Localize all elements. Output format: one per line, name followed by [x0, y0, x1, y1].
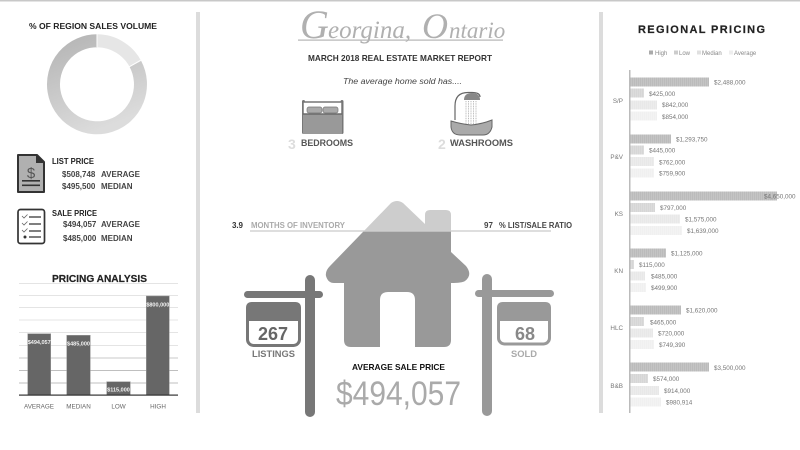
bar chart — [19, 296, 178, 410]
text: list price median: $495,500 — [62, 182, 96, 191]
panel: list price — [18, 155, 141, 192]
chart group: HLC: HLC — [610, 325, 623, 332]
panel: pricing analysis — [19, 274, 178, 410]
chart group: KN: $1,125,000 — [671, 250, 703, 258]
text: list price median: MEDIAN — [101, 182, 133, 191]
text: months of inventory: 3.9 — [232, 221, 244, 230]
bar chart: HIGH — [150, 404, 166, 410]
chart group: B&B: $914,000 — [664, 388, 691, 395]
icon: price document: $ — [27, 165, 36, 182]
text: sale price median: $485,000 — [63, 234, 97, 243]
chart group: HLC: $720,000 — [658, 330, 685, 338]
legend: High — [655, 51, 667, 57]
title: G — [300, 2, 329, 47]
number: sold: 68 — [515, 324, 535, 344]
chart group: S/P — [613, 78, 746, 121]
chart group: B&B: $574,000 — [653, 376, 680, 383]
chart group: S/P: $854,000 — [662, 114, 689, 121]
panel: region sales volume — [29, 22, 158, 128]
text: the average home sold has: The average home sold has.... — [343, 77, 462, 86]
chart group: KS: $1,575,000 — [685, 216, 717, 224]
text: average sale price label: AVERAGE SALE PRICE — [352, 362, 445, 372]
chart group: P&V — [610, 134, 708, 178]
chart group: KN: $115,000 — [639, 262, 665, 269]
donut chart — [53, 34, 141, 128]
bar chart: $800,000 — [146, 302, 169, 308]
chart group: B&B: $3,500,000 — [714, 365, 746, 372]
legend — [649, 50, 757, 57]
bar chart: AVERAGE — [24, 404, 54, 410]
text: sale price average: AVERAGE — [101, 220, 141, 229]
legend: Average — [734, 51, 757, 57]
chart group: S/P: $2,488,000 — [714, 80, 746, 86]
text: list price label: LIST PRICE — [52, 157, 95, 166]
bar chart: LOW — [111, 404, 126, 410]
heading: regional pricing: REGIONAL PRICING — [638, 24, 765, 36]
chart group: KN: $499,900 — [651, 285, 678, 292]
chart group: P&V: $762,000 — [659, 160, 686, 166]
chart group: S/P: $842,000 — [662, 102, 689, 109]
chart group: B&B: B&B — [610, 383, 623, 390]
chart group: KS: $797,000 — [660, 205, 687, 212]
chart group: P&V: $445,000 — [649, 148, 676, 154]
icon: checklist — [18, 210, 44, 244]
text: list/sale ratio: % LIST/SALE RATIO — [499, 221, 572, 230]
bar chart: MEDIAN — [66, 404, 91, 410]
chart group: HLC: $749,390 — [659, 342, 686, 349]
chart group: P&V: $1,293,750 — [676, 136, 708, 144]
title: O — [422, 6, 448, 46]
panel: regional pricing — [610, 24, 796, 413]
chart group: S/P: S/P — [613, 98, 623, 105]
chart group: KS: $1,639,000 — [687, 228, 719, 235]
chart group: KN: KN — [614, 268, 623, 275]
legend: Low — [679, 51, 691, 57]
text: sale price label: SALE PRICE — [52, 209, 98, 218]
title: eorgina, — [328, 17, 411, 44]
title: ntario — [449, 18, 505, 43]
chart group: P&V: P&V — [610, 154, 624, 161]
bar chart: $494,057 — [28, 340, 51, 346]
chart group: S/P: $425,000 — [649, 91, 676, 98]
text: list/sale ratio: 97 — [484, 221, 493, 230]
bar chart: $115,000 — [107, 388, 130, 394]
text: WASHROOMS — [450, 138, 513, 148]
text: washrooms: 2 — [438, 136, 446, 152]
chart group: HLC: $465,000 — [650, 320, 677, 326]
legend: Median — [702, 51, 722, 57]
chart group: KN — [614, 248, 703, 292]
chart group: KS: KS — [615, 211, 623, 218]
icon: bed — [302, 100, 344, 134]
chart group: HLC — [610, 306, 718, 349]
text: average sale price value: $494,057 — [336, 375, 461, 413]
subtitle: MARCH 2018 REAL ESTATE MARKET REPORT — [308, 53, 493, 63]
label: sold: SOLD — [511, 349, 537, 360]
text: list price average: $508,748 — [62, 170, 96, 179]
text: sale price average: $494,057 — [63, 220, 97, 229]
text: bedrooms: 3 — [288, 136, 296, 152]
sign: listings — [244, 275, 323, 417]
icon: shower and tub — [451, 92, 492, 135]
chart group: KN: $485,000 — [651, 274, 678, 280]
chart group: HLC: $1,620,000 — [686, 308, 718, 314]
text: months of inventory: MONTHS OF INVENTORY — [251, 221, 346, 230]
chart group: KS — [615, 192, 796, 235]
text: sale price median: MEDIAN — [101, 234, 133, 243]
icon: house — [326, 201, 469, 347]
sign: sold — [475, 274, 554, 416]
text: list price average: AVERAGE — [101, 170, 141, 179]
chart group: KS: $4,650,000 — [764, 194, 796, 200]
heading: pricing analysis: PRICING ANALYSIS — [52, 274, 147, 285]
label: listings: LISTINGS — [252, 349, 295, 360]
bar chart: $485,000 — [67, 342, 90, 348]
heading: % of region sales volume: % OF REGION SALES VOLUME — [29, 22, 158, 31]
panel: sale price — [18, 209, 141, 244]
text: BEDROOMS — [301, 138, 353, 148]
chart group: P&V: $759,900 — [659, 170, 686, 178]
chart group: B&B: $980,914 — [666, 400, 693, 406]
chart group: B&B — [610, 362, 746, 406]
number: listings: 267 — [258, 324, 288, 344]
